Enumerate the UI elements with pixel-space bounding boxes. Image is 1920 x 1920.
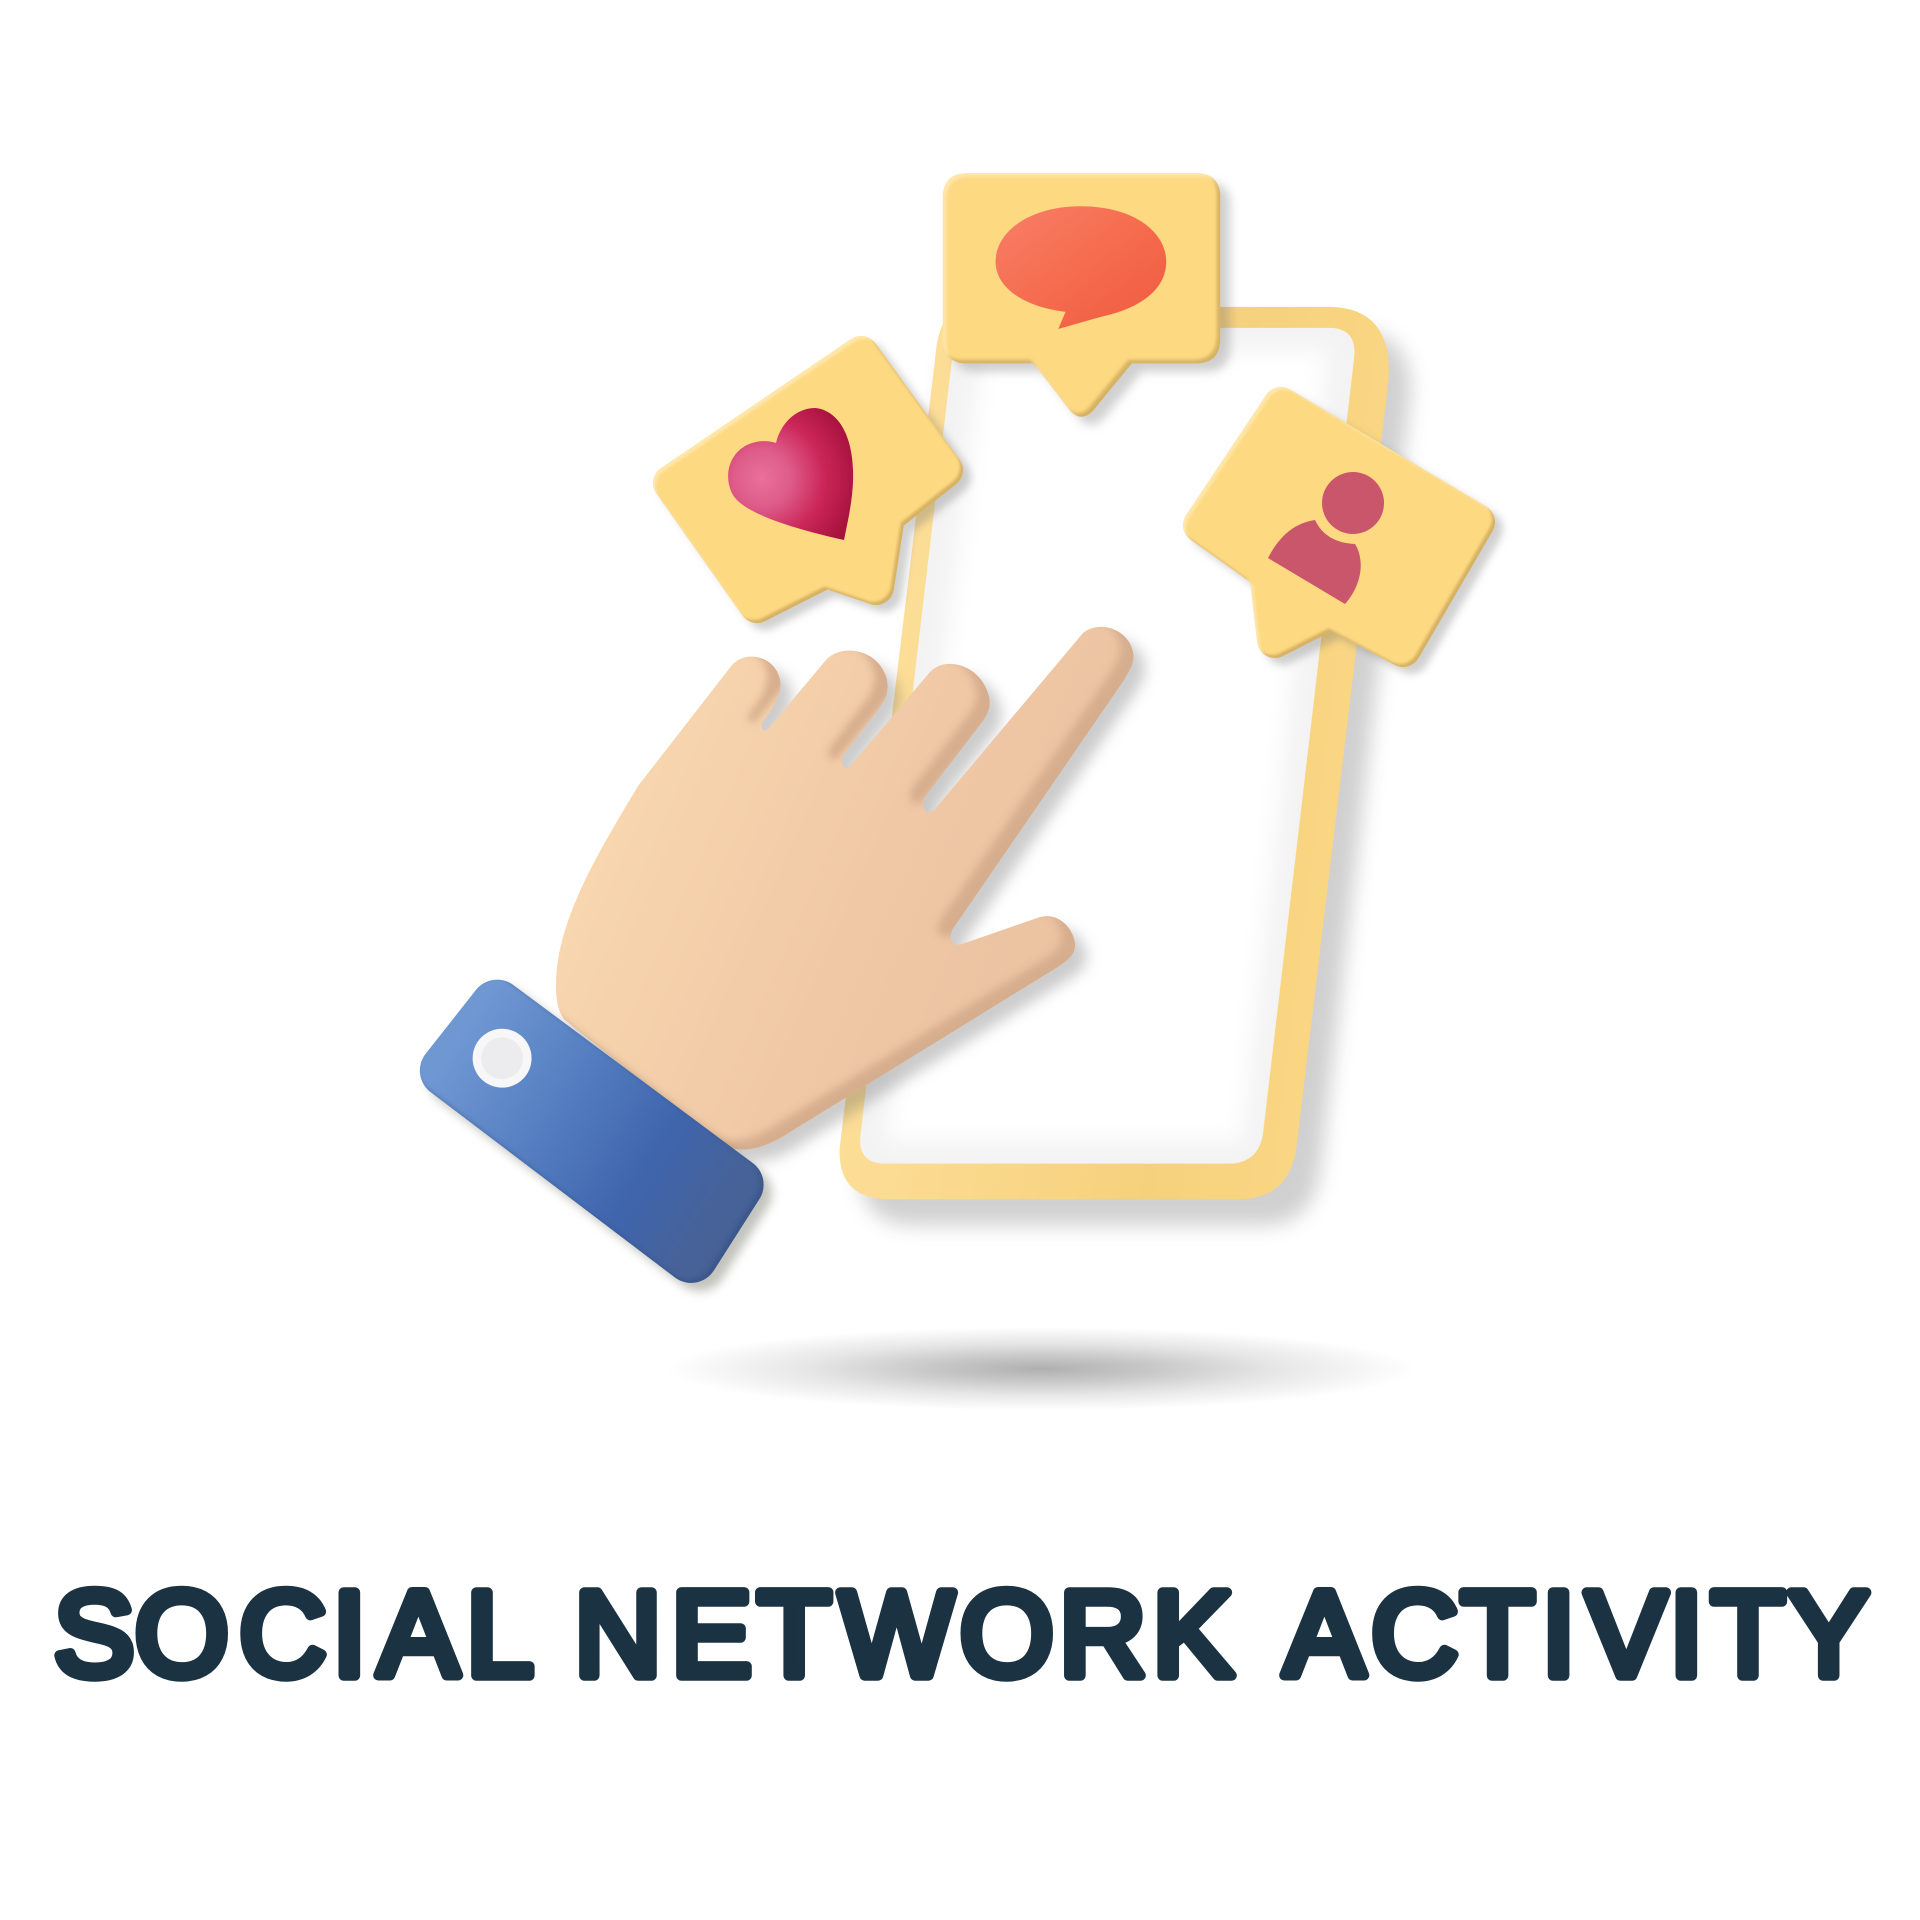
icon: heart (728, 408, 853, 540)
title: SOCIAL NETWORK ACTIVITY (54, 1568, 1869, 1702)
phone shadow (859, 329, 1410, 1225)
icon: user (1268, 472, 1384, 604)
phone body (840, 307, 1389, 1199)
hand pointing at phone (556, 627, 1133, 1149)
ground shadow (667, 1327, 1415, 1411)
phone screen (847, 319, 1375, 1179)
speech bubble: user notification (1201, 405, 1477, 649)
infographic canvas (54, 173, 1872, 1682)
speech bubble: chat notification (943, 173, 1220, 417)
shirt cuff (447, 1007, 737, 1256)
speech bubble: heart notification (671, 354, 945, 605)
icon: chat balloon (996, 206, 1166, 329)
smartphone (840, 307, 1410, 1225)
icon: cuff button (473, 1029, 532, 1088)
